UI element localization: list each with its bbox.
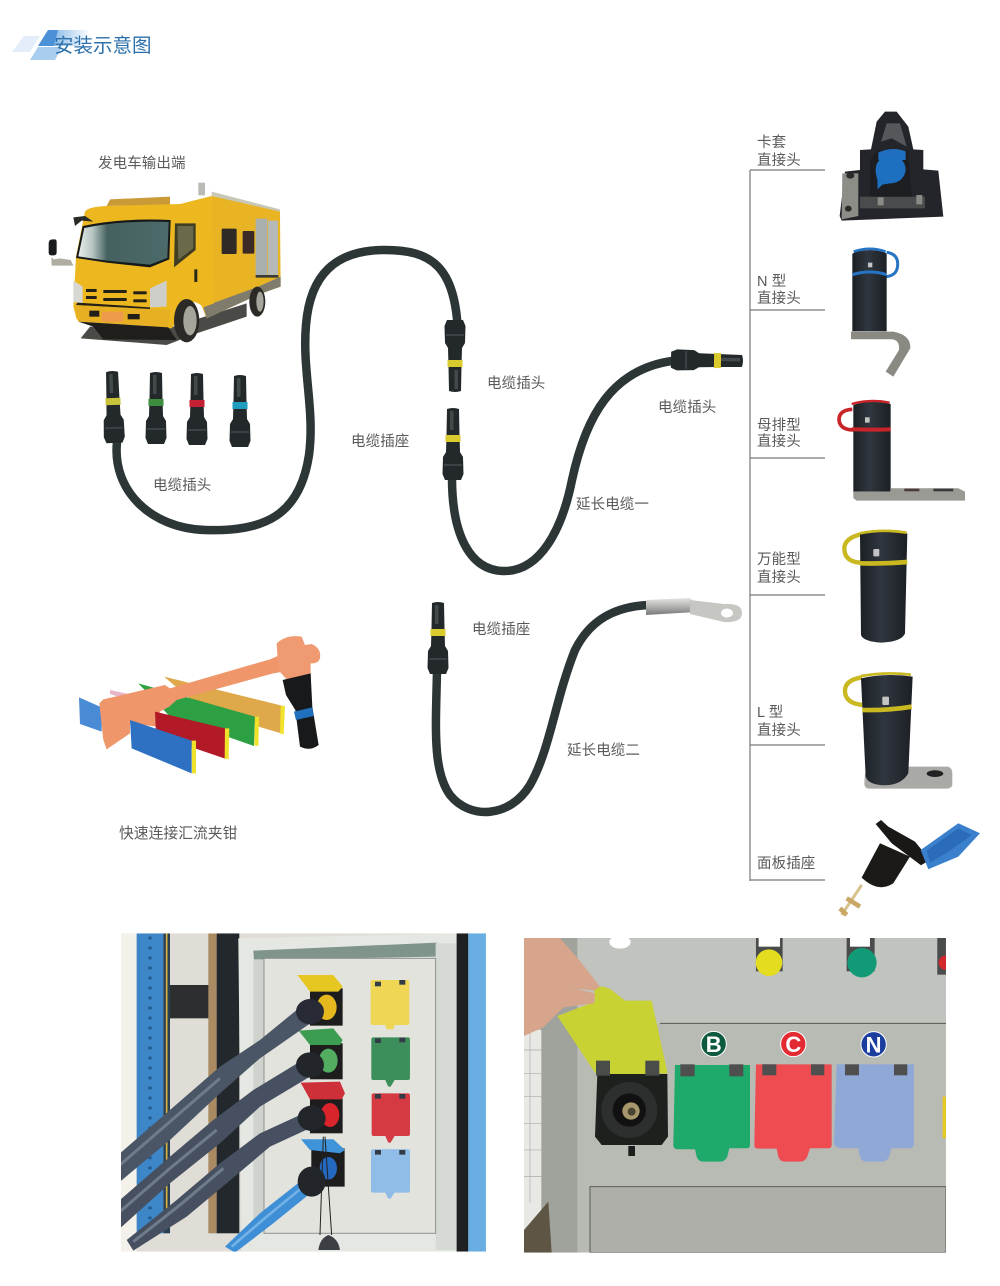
socket rings	[317, 995, 337, 1020]
windshield	[76, 219, 171, 267]
panel background	[538, 975, 946, 1252]
red bar	[155, 712, 225, 759]
labels: connector types: L 型	[757, 704, 783, 721]
product: ferrule connector	[840, 112, 943, 221]
right side	[457, 933, 468, 1252]
icon: title parallelograms	[12, 30, 90, 60]
black plug	[283, 673, 319, 749]
wheels	[174, 299, 199, 342]
cap hinges	[375, 980, 405, 1155]
cable plugs set	[102, 371, 250, 447]
cabinet background	[121, 933, 486, 1252]
blue cover	[834, 1064, 914, 1162]
labels: connector types: 万能型	[757, 551, 801, 568]
product: panel socket	[840, 820, 980, 915]
roof light	[107, 197, 170, 206]
photo: panel sockets: C	[785, 1032, 801, 1057]
labels: connector types: 直接头	[757, 569, 801, 586]
socket housings	[310, 988, 343, 1026]
cable labels: 电缆插头	[658, 399, 716, 416]
connector: socket on extension two	[428, 602, 448, 674]
products upper	[839, 112, 965, 501]
green bar	[138, 683, 255, 746]
wall tiles	[524, 1030, 541, 1253]
pink bar	[110, 690, 128, 698]
labels: connector types: 直接头	[757, 290, 801, 307]
storage caps	[371, 980, 410, 1199]
grille	[76, 289, 150, 309]
yellow edge	[943, 1097, 946, 1138]
green cover	[673, 1065, 750, 1162]
mirror	[49, 239, 57, 255]
hand	[524, 938, 600, 1036]
photo: installed cabinet	[120, 933, 486, 1253]
cable labels	[153, 375, 716, 759]
plug blue	[230, 375, 250, 447]
cable lug	[646, 598, 742, 622]
cable glands	[296, 999, 324, 1024]
cable labels: 延长电缆一	[576, 496, 649, 513]
cable labels: 电缆插座	[351, 433, 409, 450]
rust rail	[208, 933, 217, 1233]
left blue bar	[79, 697, 102, 732]
plug green	[146, 372, 166, 444]
cover hinges	[680, 1064, 907, 1076]
red cover	[754, 1064, 832, 1162]
cable labels: 电缆插头	[487, 375, 545, 392]
label: busbar clamp: 快速连接汇流夹钳	[119, 825, 238, 842]
door window	[174, 223, 196, 267]
cable: extension one	[452, 360, 680, 571]
labels: connector types: 卡套	[757, 134, 787, 151]
labels: connector types: 母排型	[757, 417, 801, 434]
label: generator output: 发电车输出端	[98, 155, 186, 172]
product: universal connector	[844, 531, 907, 643]
products lower	[840, 531, 980, 915]
labels: connector types	[757, 134, 815, 872]
title: 安装示意图	[54, 35, 152, 57]
orange bar	[164, 677, 283, 734]
connector: plug on extension one	[442, 408, 464, 480]
blue rail	[137, 933, 163, 1233]
labels: connector types: N 型	[757, 273, 786, 290]
truck shadow	[81, 303, 247, 345]
brass stud	[842, 885, 862, 915]
truck cab	[73, 196, 214, 328]
title	[12, 30, 152, 60]
cable: generator to socket	[117, 250, 458, 530]
labels: connector types: 直接头	[757, 152, 801, 169]
hanging cap	[318, 1235, 340, 1250]
cable labels: 电缆插座	[472, 621, 530, 638]
connector: end of extension one	[671, 349, 743, 371]
photo: panel sockets	[524, 935, 953, 1253]
clamp head	[277, 636, 320, 681]
handle	[99, 655, 283, 749]
yellow lid	[557, 987, 668, 1075]
plug red	[186, 373, 208, 445]
box windows	[222, 229, 237, 254]
socket lids	[297, 975, 343, 992]
labels: connector types: 直接头	[757, 433, 801, 450]
labels: connector types: 直接头	[757, 722, 801, 739]
door frame	[238, 933, 457, 1252]
cable: extension two	[436, 605, 650, 812]
blue cap	[878, 149, 906, 160]
underbody	[78, 322, 177, 340]
truck box	[200, 196, 281, 318]
cable labels: 电缆插头	[153, 477, 211, 494]
headlights	[73, 281, 83, 303]
photo: panel sockets: N	[866, 1032, 882, 1057]
door handle	[194, 269, 197, 282]
busbar clamp	[79, 636, 320, 773]
roller doors	[256, 219, 267, 276]
photo: panel sockets: B	[706, 1032, 722, 1057]
product: L type connector	[845, 673, 952, 789]
bumper	[74, 305, 170, 327]
plug yellow	[102, 371, 125, 443]
phase badges	[701, 1031, 726, 1057]
front blue bar	[130, 720, 192, 773]
black socket	[595, 1074, 668, 1145]
cable labels: 延长电缆二	[567, 742, 640, 759]
pilot lights	[756, 938, 783, 971]
connector: socket on main cable	[444, 320, 466, 392]
cables	[120, 1010, 317, 1253]
product: busbar connector	[839, 401, 965, 501]
truck	[49, 183, 281, 345]
bracket lines	[750, 170, 825, 881]
labels: connector types: 面板插座	[757, 854, 815, 872]
product: N type connector	[851, 249, 910, 377]
door panel	[264, 958, 436, 1233]
